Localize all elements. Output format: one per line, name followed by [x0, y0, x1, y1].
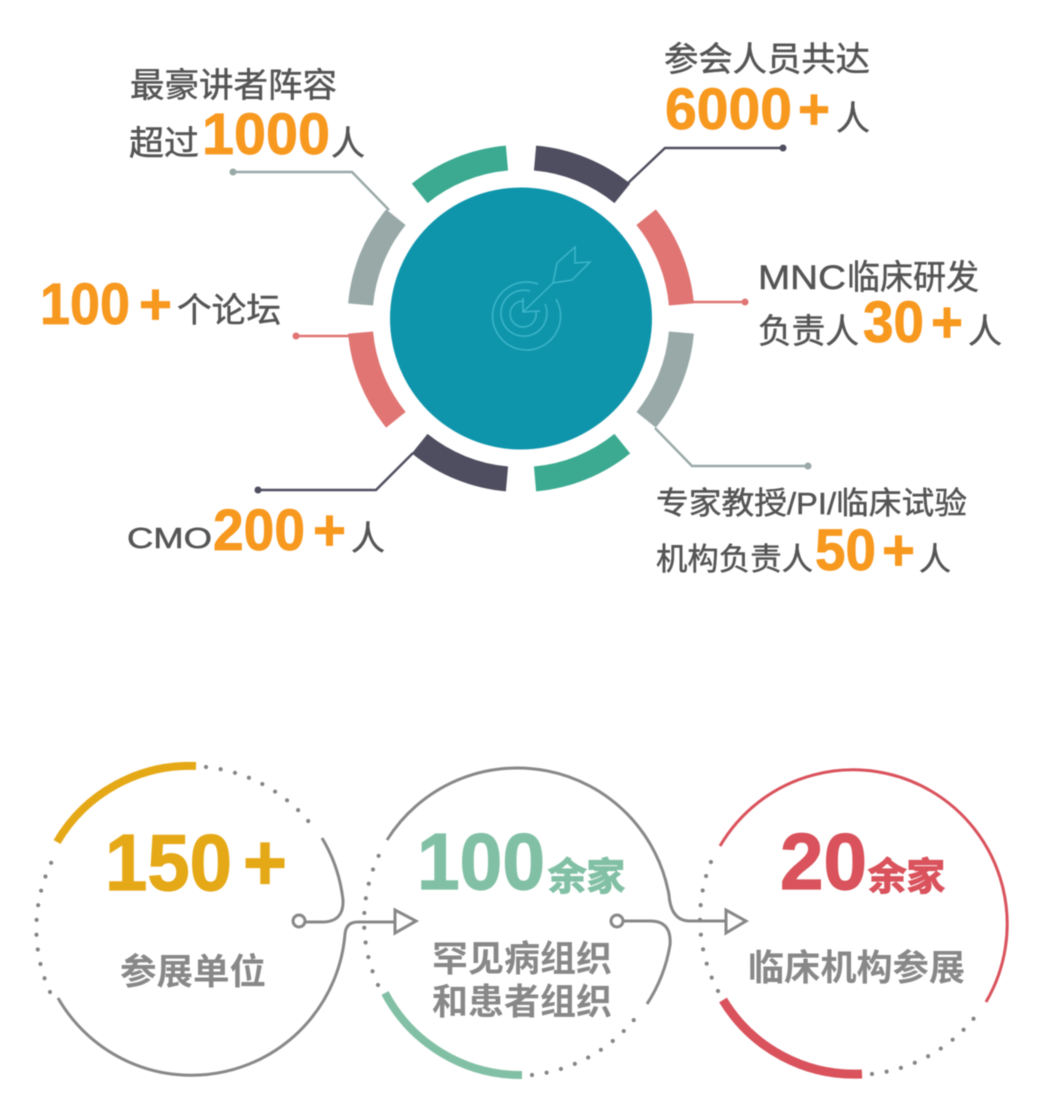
text block: forums [40, 272, 281, 337]
ring segment: green top [420, 158, 507, 193]
ring segment: grey left [361, 217, 396, 304]
text block: MNC: 人 [968, 313, 1002, 351]
text block: CMO [127, 498, 385, 563]
text block: CMO: 200 [213, 498, 305, 563]
text block: attendees [664, 41, 870, 142]
leader line: forums [292, 332, 350, 340]
figure 20: 余家 [868, 857, 945, 899]
label: 罕见病组织 [432, 938, 612, 979]
figure 150+: 150 [105, 818, 232, 907]
text block: forums: 个论坛 [177, 292, 281, 330]
panel: exhibitors circle [36, 766, 416, 1075]
text block: attendees: 人 [836, 100, 870, 138]
panel: patient organisations circle [364, 768, 746, 1075]
text block: MNC: 负责人 [758, 313, 859, 351]
gold progress arc [57, 766, 196, 842]
text block: forums: + [139, 272, 172, 337]
text block: speakers [129, 67, 365, 167]
central teal circle [390, 188, 652, 450]
figure 100: 100 [417, 817, 545, 906]
label: 参展单位 [120, 951, 266, 992]
leader line: speakers [230, 168, 389, 210]
panel: attendee target ring [361, 158, 681, 479]
text block: professors [656, 486, 967, 583]
text block: professors: 50 [815, 518, 876, 583]
red thin arc [720, 770, 1007, 1002]
grey connector with node [58, 838, 395, 1075]
text block: MNC [758, 259, 1002, 355]
leader line: attendees [627, 144, 786, 184]
dotted arcs [36, 767, 313, 992]
text block: CMO: 人 [351, 520, 385, 558]
figure 20 [780, 817, 945, 906]
text block: speakers: 最豪讲者阵容 [130, 67, 337, 105]
ring segment: dark bottom [420, 444, 507, 479]
text block: speakers: 超过 [129, 125, 199, 163]
text block: speakers: 1000 [202, 102, 330, 167]
red progress arc [723, 1000, 862, 1074]
label: 临床机构参展 [748, 947, 965, 988]
panel: clinical institutions circle [700, 770, 1007, 1074]
text block: attendees: 6000 [665, 77, 792, 142]
figure 150+: + [243, 818, 287, 907]
label [432, 938, 612, 1022]
text block: professors: 机构负责人 [656, 542, 813, 577]
leader line: CMO [254, 453, 413, 494]
text block: MNC: + [931, 290, 963, 355]
figure 100: 余家 [548, 857, 625, 899]
figure 20: 20 [780, 817, 867, 906]
dotted arcs [700, 857, 978, 1074]
text block: professors: 专家教授/PI/临床试验 [656, 486, 967, 521]
text block: professors: + [882, 518, 915, 583]
dotted arcs [364, 853, 637, 1075]
text block: CMO: + [313, 498, 346, 563]
ring segment: grey right [646, 333, 681, 420]
green progress arc [385, 993, 522, 1075]
arrow head [726, 910, 746, 933]
ring segment: dark top right [535, 158, 622, 193]
text block: MNC: 30 [863, 290, 924, 355]
icon: target with arrow [493, 247, 590, 350]
grey connector with node [387, 768, 726, 1004]
ring segment: green bottom [535, 444, 622, 479]
ring segment: salmon left [361, 333, 396, 420]
arrow head [395, 910, 416, 933]
text block: MNC: MNC [758, 259, 846, 297]
figure 100 [417, 817, 625, 906]
text block: forums: 100 [40, 272, 130, 337]
text block: CMO: CMO [127, 523, 212, 555]
leader line: MNC [692, 298, 748, 306]
label: 和患者组织 [432, 981, 612, 1022]
leader line: professors [655, 428, 812, 470]
text block: speakers: 人 [331, 125, 365, 163]
ring segment: salmon right [646, 217, 681, 304]
text block: attendees: 参会人员共达 [664, 41, 870, 79]
text block: attendees: + [798, 77, 830, 142]
text block: MNC: 临床研发 [847, 259, 979, 297]
text block: professors: 人 [919, 541, 951, 577]
